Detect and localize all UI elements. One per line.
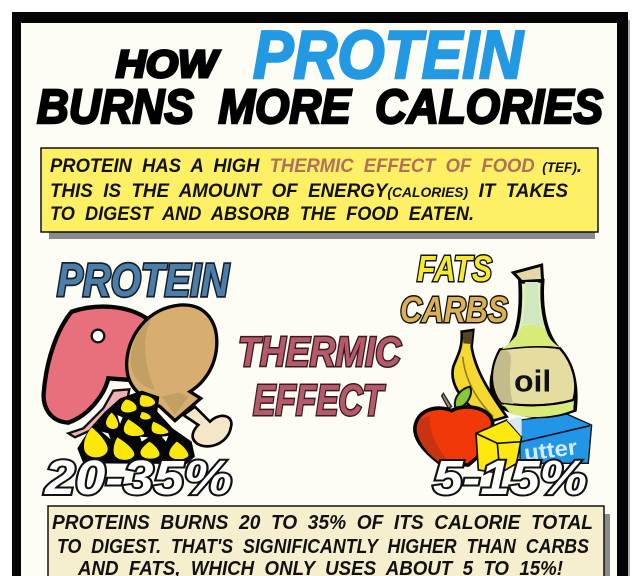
label: CARBS: CARBS [400, 289, 508, 330]
label: 5-15%: 5-15% [433, 452, 587, 505]
title word: PROTEIN: PROTEIN [253, 17, 525, 93]
icon: chicken drumstick [127, 305, 231, 446]
label: FATS: FATS [417, 248, 492, 289]
icon: apple [415, 387, 493, 465]
icon: butter pat [476, 417, 522, 473]
label: thermic effect: EFFECT [253, 376, 385, 425]
icon: carbs and fats foods [415, 265, 592, 473]
icon: protein foods [44, 305, 231, 464]
callout: yellow TEF definition: THIS IS THE AMOUNT OF ENERGY(CALORIES) IT TAKES [50, 181, 568, 202]
title word: HOW: HOW [116, 44, 220, 86]
label: PROTEIN: PROTEIN [57, 254, 230, 306]
icon: butter box [520, 414, 592, 466]
icon: butter box: utter [523, 434, 579, 466]
callout: yellow TEF definition: PROTEIN HAS A HIGH THERMIC EFFECT OF FOOD (TEF). [50, 156, 582, 177]
label: thermic effect [238, 328, 402, 425]
icon: corn kernels [77, 391, 195, 464]
label: 20-35%: 20-35% [44, 452, 232, 505]
callout: calorie comparison: TO DIGEST. THAT'S SIGNIFICANTLY HIGHER THAN CARBS [57, 536, 590, 558]
callout: calorie comparison: PROTEINS BURNS 20 TO 35% OF ITS CALORIE TOTAL [52, 512, 593, 534]
label: thermic effect: THERMIC [238, 328, 402, 375]
callout: calorie comparison [48, 506, 610, 576]
icon: oil bottle: oil [514, 365, 551, 399]
icon: banana [453, 330, 507, 422]
icon: oil bottle [491, 265, 576, 417]
title [37, 17, 603, 134]
callout: yellow TEF definition: TO DIGEST AND ABSORB THE FOOD EATEN. [50, 204, 474, 225]
icon: steak [44, 307, 147, 437]
callout: yellow TEF definition [41, 148, 598, 239]
title line: burns more calories: BURNS MORE CALORIES [37, 81, 603, 134]
